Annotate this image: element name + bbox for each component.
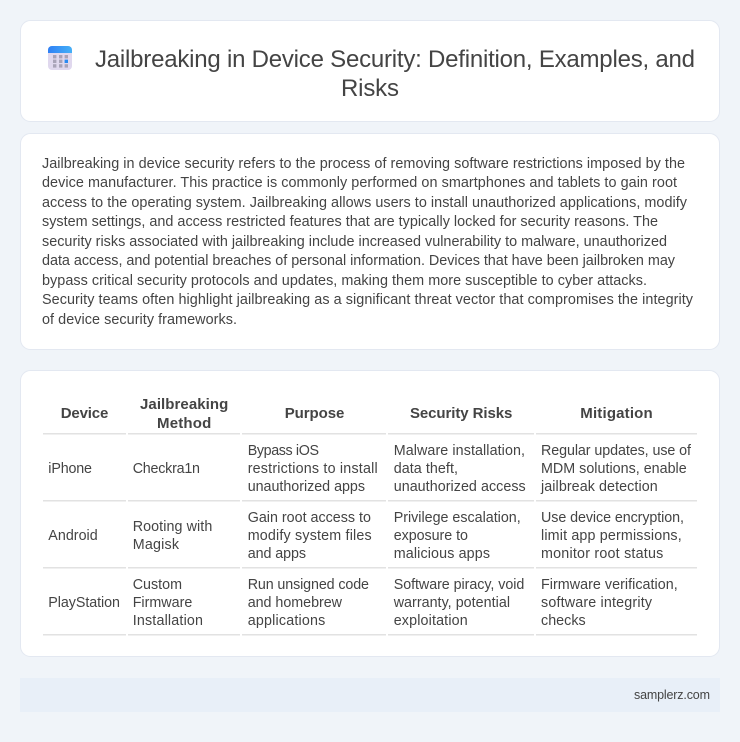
table row: PlayStation: checks: [541, 613, 586, 629]
panel: description: [20, 134, 720, 350]
table row: iPhone: [43, 443, 697, 502]
table row: PlayStation: PlayStation: [48, 595, 120, 611]
title: Jailbreaking in Device Security: Definition, Examples, and: [95, 46, 695, 73]
table row: Android: modify system files: [248, 528, 372, 544]
table row: Android: monitor root status: [541, 546, 663, 562]
text block: description paragraph: of device security frameworks.: [42, 312, 237, 328]
table row: iPhone: unauthorized access: [394, 479, 526, 495]
text block: description paragraph: Security teams often highlight jailbreaking as a significant threat vector that compromises the integrity: [42, 292, 694, 308]
table row: Android: exposure to: [394, 528, 468, 544]
table row: Android: Android: [48, 528, 98, 544]
table row: PlayStation: warranty, potential: [393, 595, 510, 611]
table row: PlayStation: Software piracy, void: [394, 577, 524, 593]
table header row: Jailbreaking: [140, 396, 228, 413]
table row: Android: and apps: [248, 546, 306, 562]
table row: PlayStation: exploitation: [394, 613, 468, 629]
table row: Android: Magisk: [133, 537, 180, 553]
table row: PlayStation: Custom: [133, 577, 182, 593]
table header row: Method: [157, 415, 211, 432]
table row: iPhone: unauthorized apps: [248, 479, 365, 495]
table row: Android: limit app permissions,: [541, 528, 682, 544]
table header row: Purpose: [285, 405, 344, 422]
table row: iPhone: iPhone: [48, 461, 92, 477]
footer bar: [20, 678, 720, 712]
table header row: Security Risks: [410, 405, 512, 422]
text block: description paragraph: [42, 156, 694, 328]
table row: Android: Gain root access to: [248, 510, 371, 526]
table row: PlayStation: and homebrew: [248, 595, 343, 611]
table row: iPhone: jailbreak detection: [540, 479, 658, 495]
text block: description paragraph: data access, and potential breaches of personal information. Devices that have been jailbroken may: [42, 253, 676, 269]
table row: iPhone: data theft,: [394, 461, 458, 477]
table row: PlayStation: software integrity: [541, 595, 653, 611]
table row: PlayStation: [43, 577, 697, 636]
footer text: samplerz.com: [634, 688, 710, 702]
table row: iPhone: Regular updates, use of: [541, 443, 691, 459]
text block: description paragraph: device manufacturer. This practice is commonly performed on smartphones and tablets to gain root: [42, 175, 677, 191]
text block: description paragraph: Jailbreaking in device security refers to the process of removing software restrictions imposed by the: [42, 156, 685, 172]
table row: iPhone: MDM solutions, enable: [541, 461, 687, 477]
title: [95, 46, 695, 102]
panel: comparison table: [20, 370, 720, 656]
icon: calendar: [48, 46, 72, 70]
table row: PlayStation: Firmware verification,: [541, 577, 678, 593]
text block: description paragraph: security risks associated with jailbreaking include increased vulnerability to malware, unauthorized: [42, 234, 667, 250]
table row: PlayStation: Firmware: [133, 595, 192, 611]
table row: PlayStation: applications: [248, 613, 325, 629]
table header row: [43, 396, 697, 434]
text block: description paragraph: access to the operating system. Jailbreaking allows users to install unauthorized applications, modify: [42, 195, 688, 211]
title: Risks: [341, 75, 399, 102]
table row: PlayStation: Installation: [133, 613, 203, 629]
table row: Android: Privilege escalation,: [394, 510, 521, 526]
table header row: Mitigation: [580, 405, 653, 422]
table header row: Device: [61, 405, 108, 422]
table row: Android: malicious apps: [394, 546, 490, 562]
table row: Android: [43, 510, 697, 568]
table row: PlayStation: Run unsigned code: [248, 577, 369, 593]
table row: Android: Rooting with: [133, 519, 212, 535]
panel: title card: [20, 20, 720, 122]
table row: iPhone: Bypass iOS: [248, 443, 319, 459]
table row: iPhone: restrictions to install: [248, 461, 378, 477]
table row: iPhone: Checkra1n: [133, 461, 200, 477]
text block: description paragraph: system settings, and access restricted features that are typically locked for security reasons. The: [42, 214, 658, 230]
table row: iPhone: Malware installation,: [394, 443, 525, 459]
table row: Android: Use device encryption,: [541, 510, 684, 526]
text block: description paragraph: bypass critical security protocols and updates, making them more susceptible to cyber attacks.: [42, 273, 647, 289]
